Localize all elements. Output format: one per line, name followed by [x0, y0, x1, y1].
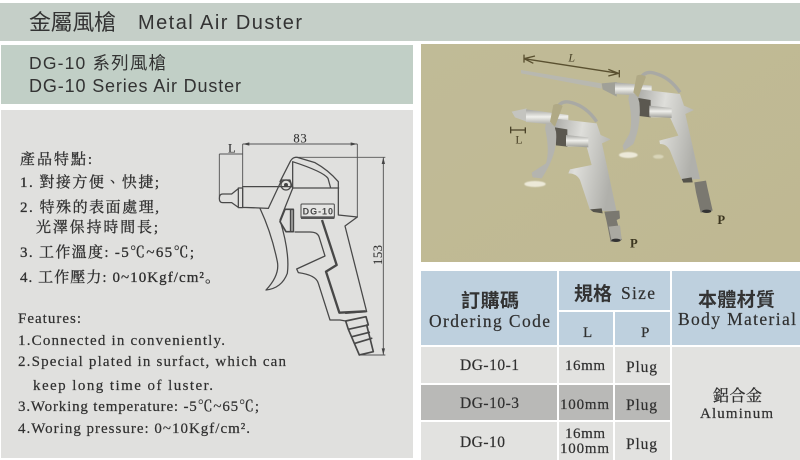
Chinese feature list: 產品特點:	[20, 150, 92, 168]
long air gun photo	[521, 70, 713, 213]
Chinese feature list: 1. 對接方便、快捷;	[20, 173, 159, 191]
top hoop opening	[293, 162, 339, 188]
English feature list: 4.Woring pressure: 0~10Kgf/cm².	[18, 421, 250, 437]
header: size: 規格	[574, 283, 612, 305]
header: size: P	[641, 325, 649, 341]
panel: product photo	[421, 44, 800, 262]
label: P: P	[717, 213, 725, 227]
header: body material: 本體材質	[698, 289, 775, 311]
DG-10 label: DG-10	[303, 207, 333, 217]
header: body material	[678, 289, 796, 329]
arrow: short nozzle length L: L	[515, 132, 523, 146]
row: DG-10-1: 16mm	[565, 358, 605, 374]
title: English: Metal Air Duster	[138, 12, 302, 34]
Chinese feature list	[20, 150, 220, 286]
highlighted row	[421, 385, 670, 420]
gun body outline	[280, 157, 367, 321]
row: DG-10: Plug	[626, 436, 657, 453]
header: body material: Body Material	[678, 309, 796, 329]
dimension: L	[219, 141, 243, 197]
table body cells	[421, 347, 800, 460]
dimension: 83: 83	[293, 132, 307, 146]
title band	[0, 3, 800, 41]
series heading panel	[1, 45, 413, 104]
nozzle	[219, 187, 293, 208]
Chinese feature list: 3. 工作溫度: -5℃~65℃;	[20, 243, 194, 261]
label: P: P	[630, 236, 638, 250]
adjusting knob	[280, 209, 293, 232]
hose coupling	[346, 317, 373, 355]
row: DG-10-1: Plug	[626, 359, 657, 376]
row: DG-10-1: DG-10-1	[460, 357, 519, 374]
panel: features and drawing	[1, 110, 413, 458]
title: Chinese: 金屬風槍	[29, 10, 116, 35]
white highlights under guns	[524, 152, 664, 187]
pivot	[281, 180, 291, 190]
row: DG-10: 16mm	[565, 426, 605, 442]
row: DG-10-3: 100mm	[560, 397, 609, 413]
body material value: 鋁合金	[713, 387, 762, 405]
body material value: Aluminum	[700, 406, 773, 422]
English feature list: Features:	[18, 311, 81, 327]
header: ordering code	[429, 290, 550, 331]
row: DG-10-1	[460, 357, 657, 376]
DG-10 label	[301, 204, 334, 219]
panel: ordering table	[421, 271, 800, 460]
English feature list: keep long time of luster.	[33, 378, 213, 394]
header: ordering code: 訂購碼	[461, 290, 519, 312]
series heading: English: DG-10 Series Air Duster	[29, 76, 241, 96]
arrow: long nozzle length L: L	[567, 51, 575, 65]
English feature list	[18, 311, 286, 437]
handle inner edge	[322, 220, 366, 313]
short air gun photo	[512, 102, 622, 242]
row: DG-10-3: Plug	[626, 397, 657, 414]
English feature list: 2.Special plated in surfact, which can	[18, 354, 286, 370]
row: DG-10: DG-10	[460, 434, 505, 451]
row: DG-10-3: DG-10-3	[460, 395, 519, 412]
row: DG-10-3	[460, 395, 657, 414]
English feature list: 1.Connected in conveniently.	[18, 333, 225, 349]
Chinese feature list: 4. 工作壓力: 0~10Kgf/cm²。	[20, 269, 220, 286]
technical drawing of air gun	[219, 132, 385, 355]
header: ordering code: Ordering Code	[429, 311, 550, 331]
row: DG-10: 100mm	[560, 441, 609, 457]
arrow: short nozzle length L	[511, 127, 526, 146]
dimension: 83	[243, 132, 357, 217]
row: DG-10	[460, 426, 657, 457]
English feature list: 3.Working temperature: -5℃~65℃;	[18, 399, 259, 415]
table header cells	[421, 271, 800, 345]
header: size: L	[583, 325, 592, 341]
dimension: L: L	[228, 141, 236, 155]
dimension: 153	[295, 157, 385, 355]
Chinese feature list: 光澤保持時間長;	[36, 218, 158, 236]
header: size: Size	[621, 283, 655, 303]
header: size	[574, 283, 655, 341]
body material value	[700, 387, 773, 422]
Chinese feature list: 2. 特殊的表面處理,	[20, 198, 159, 216]
dimension: 153: 153	[371, 245, 385, 265]
trigger lever	[260, 180, 293, 290]
series heading: Chinese: DG-10 系列風槍	[29, 53, 166, 73]
arrow: long nozzle length L	[524, 51, 619, 77]
